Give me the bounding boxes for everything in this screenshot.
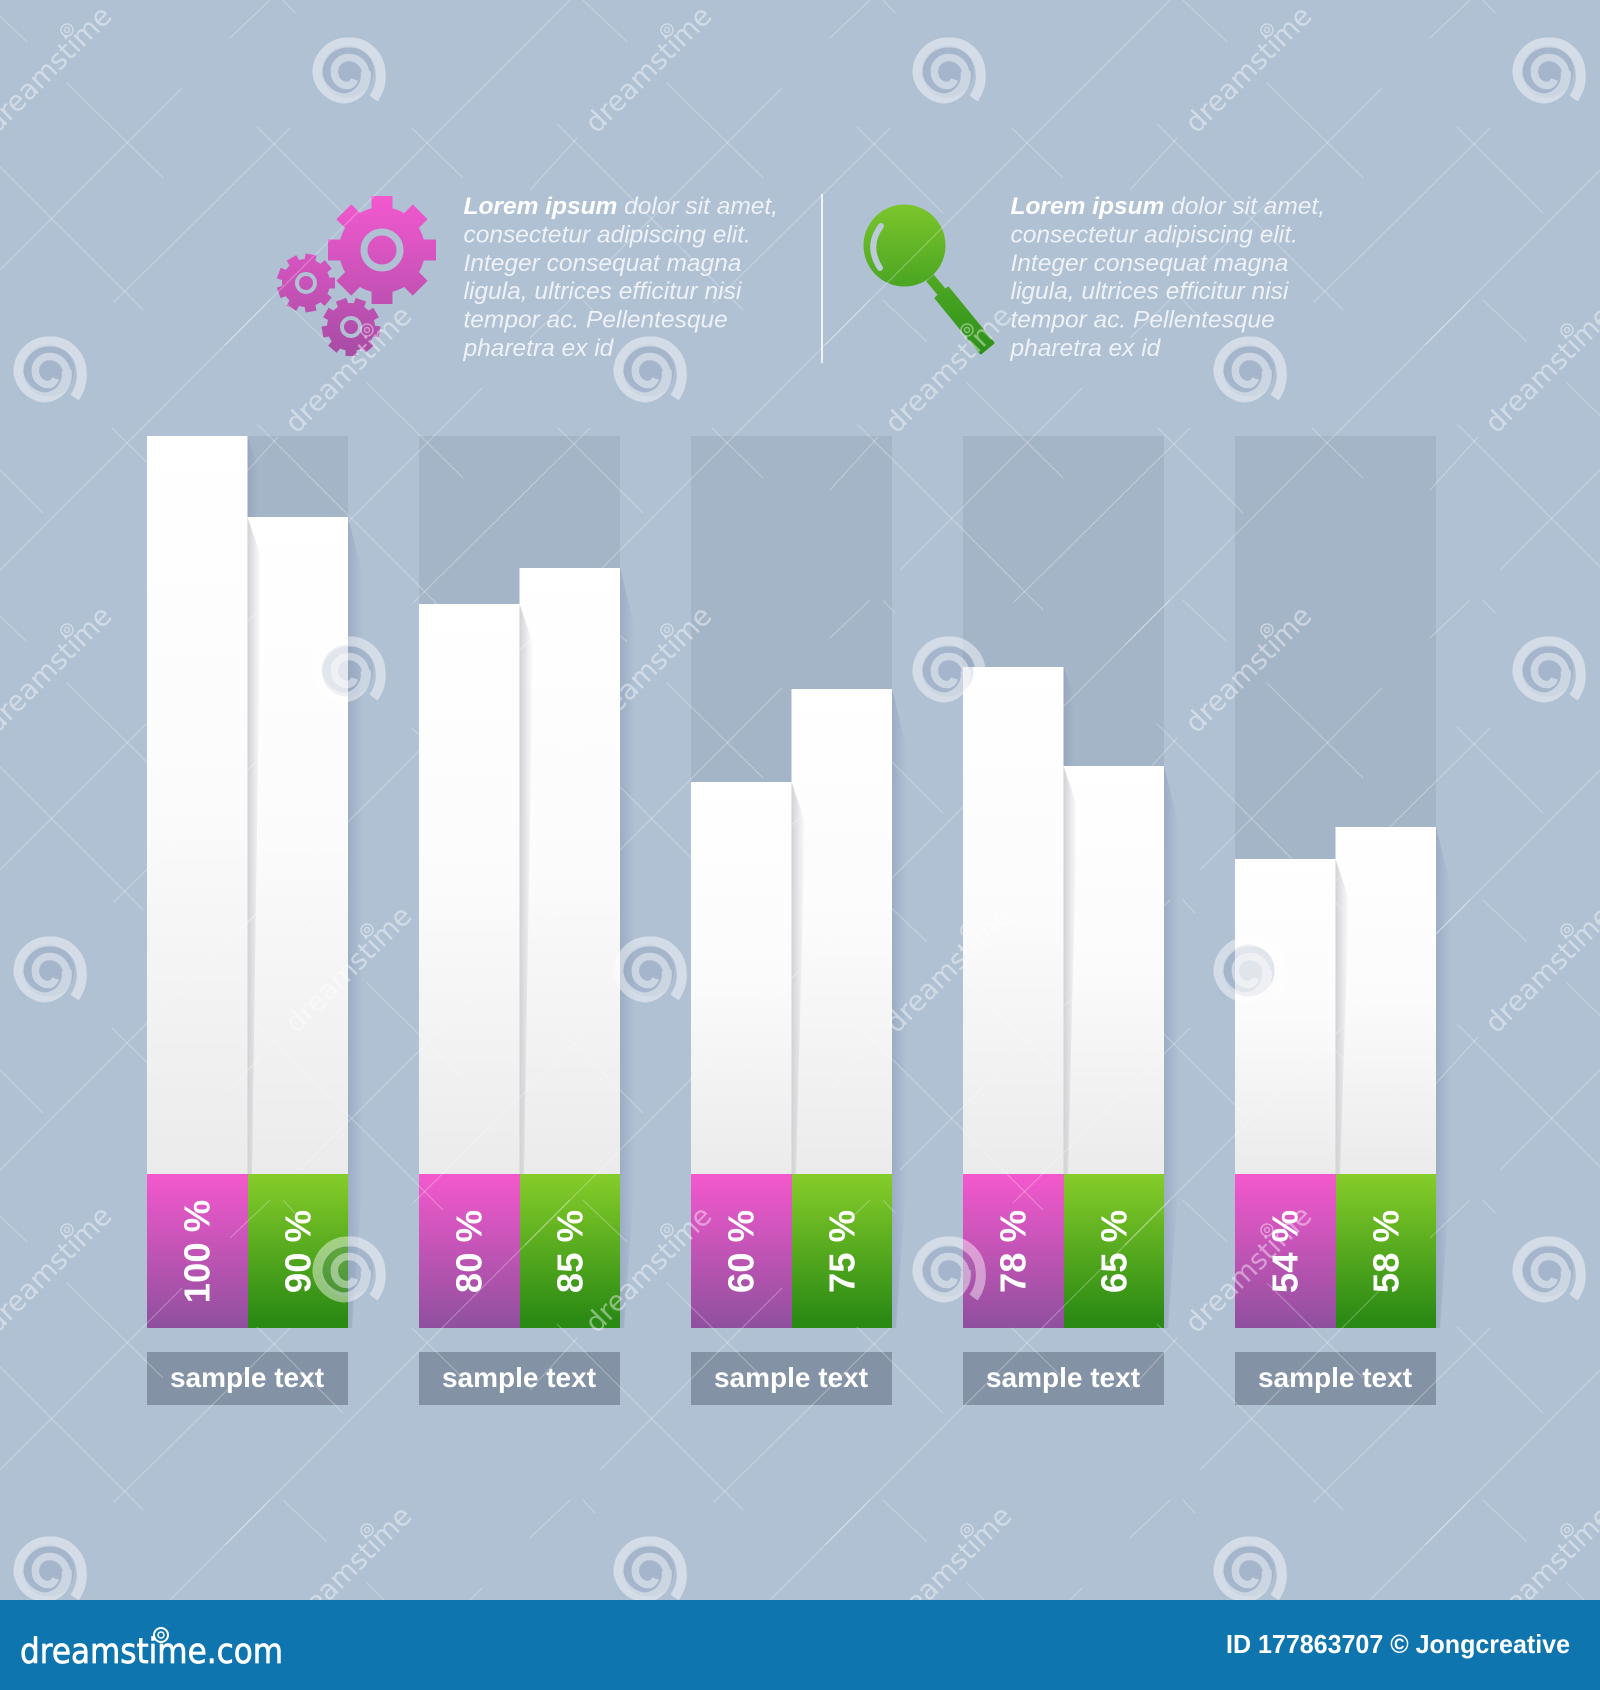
tile: 65 % (1064, 1174, 1164, 1328)
tile: 54 %: 54 % (1264, 1210, 1306, 1293)
tile: 54 % (1235, 1174, 1336, 1328)
tile: 60 %: 60 % (720, 1210, 762, 1293)
label: sample text (691, 1352, 892, 1405)
watermark text: dreamstime (278, 299, 418, 439)
footer bar (0, 1600, 1600, 1690)
bar group 3: 60 % / 75 % (691, 436, 907, 1405)
text block: left description: consectetur adipiscing elit. (464, 221, 751, 248)
label: sample text: sample text (1258, 1362, 1412, 1393)
label: sample text: sample text (170, 1362, 324, 1393)
tile: 58 %: 58 % (1366, 1210, 1406, 1293)
footer image id and credit: ID 177863707 © Jongcreative (1226, 1629, 1570, 1659)
label: sample text (963, 1352, 1164, 1405)
text block: right description: pharetra ex id (1010, 335, 1162, 362)
tile: 85 % (520, 1174, 620, 1328)
header: gears icon and text (276, 196, 776, 361)
icon: footer logo swirl (154, 1628, 168, 1642)
watermark text: dreamstime (578, 0, 718, 139)
text block: right description: ligula, ultrices efficitur nisi (1010, 278, 1289, 305)
text block: left description: Lorem ipsum dolor sit amet, (464, 193, 778, 220)
icon: gears (276, 196, 436, 356)
text block: right description: consectetur adipiscing elit. (1010, 221, 1298, 248)
watermark text: dreamstime (1178, 1199, 1318, 1339)
watermark text: dreamstime (278, 1499, 418, 1639)
bar group 4: 78 % / 65 % (963, 436, 1179, 1405)
icon: magnifying glass (864, 204, 993, 353)
tile: 100 % (147, 1174, 248, 1328)
text block: left description: pharetra ex id (462, 335, 615, 362)
label: sample text: sample text (442, 1362, 596, 1393)
tile: 65 %: 65 % (1094, 1210, 1134, 1293)
text block: left description: Integer consequat magna (464, 250, 741, 277)
tile: 90 %: 90 % (278, 1210, 318, 1293)
tile: 80 % (419, 1174, 520, 1328)
watermark text: dreamstime (878, 899, 1018, 1039)
footer logo text: dreamstime.com (20, 1632, 283, 1672)
label: sample text (147, 1352, 348, 1405)
tile: 58 % (1336, 1174, 1436, 1328)
watermark text: dreamstime (278, 899, 418, 1039)
tile: 78 % (963, 1174, 1064, 1328)
tile: 78 %: 78 % (992, 1210, 1034, 1293)
bar group 1: 100 % / 90 % (147, 436, 363, 1405)
text block: right description: tempor ac. Pellentesque (1010, 307, 1275, 334)
tile: 60 % (691, 1174, 792, 1328)
label: sample text: sample text (714, 1362, 868, 1393)
watermark text: dreamstime (578, 599, 718, 739)
text block: left description: tempor ac. Pellentesque (464, 307, 728, 334)
tile: 90 % (248, 1174, 348, 1328)
tile: 75 %: 75 % (822, 1210, 862, 1293)
bar group 2: 80 % / 85 % (419, 436, 635, 1405)
label: sample text (1235, 1352, 1436, 1405)
watermark text: dreamstime (878, 1499, 1018, 1639)
watermark text: dreamstime (1178, 0, 1318, 139)
text block: right description: Lorem ipsum dolor sit amet, (1010, 193, 1325, 220)
label: sample text: sample text (986, 1362, 1140, 1393)
watermark text: dreamstime (1178, 599, 1318, 739)
tile: 100 %: 100 % (176, 1200, 218, 1303)
text block: right description: Integer consequat magna (1010, 250, 1288, 277)
header: magnifier icon and text (864, 193, 1325, 362)
text block: left description: ligula, ultrices efficitur nisi (464, 278, 742, 305)
watermark text: dreamstime (878, 299, 1018, 439)
divider (821, 194, 823, 363)
tile: 75 % (792, 1174, 892, 1328)
tile: 85 %: 85 % (550, 1210, 590, 1293)
watermark text: dreamstime (578, 1199, 718, 1339)
label: sample text (419, 1352, 620, 1405)
bar group 5: 54 % / 58 % (1235, 436, 1451, 1405)
tile: 80 %: 80 % (448, 1210, 490, 1293)
